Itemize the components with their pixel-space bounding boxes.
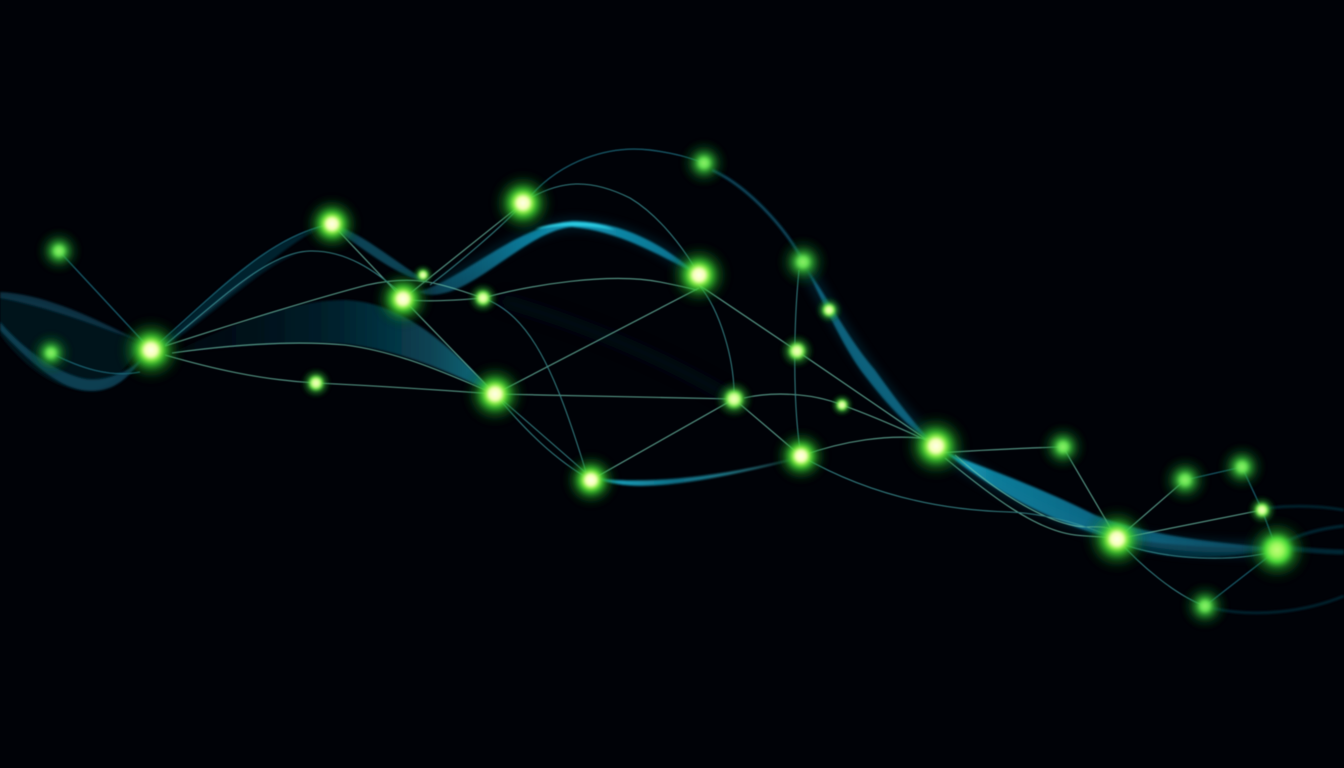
ribbon: right exit bands bbox=[1212, 506, 1344, 613]
ribbon: descending wide bbox=[806, 268, 936, 446]
small pale nodes bbox=[300, 264, 1277, 525]
ribbon: upper descending thin bbox=[712, 170, 805, 265]
ribbon: crest bbox=[418, 221, 697, 295]
connection lines bbox=[51, 149, 1277, 606]
ribbon: bottom trough bbox=[600, 460, 790, 485]
ribbon: node shoulder bbox=[335, 225, 428, 282]
bright lines bbox=[165, 203, 1262, 539]
glow: lower right bbox=[945, 452, 1275, 549]
glow under ribbons bbox=[440, 224, 1275, 549]
glow: crest bbox=[440, 224, 697, 285]
ribbon: far left lower edge bbox=[0, 322, 143, 391]
glow: descent bbox=[806, 268, 936, 446]
ribbon: central left fold bbox=[172, 300, 495, 394]
ribbon: lower right under band bbox=[1125, 538, 1275, 557]
large bright nodes bbox=[115, 169, 1153, 575]
ribbons bbox=[0, 170, 1344, 613]
teal lines bbox=[165, 184, 1272, 606]
ribbon: lower right sweep bbox=[945, 452, 1275, 552]
ribbon: far left body bbox=[0, 296, 140, 391]
dim lines bbox=[51, 149, 1277, 606]
ribbon: rising second band bbox=[160, 251, 305, 350]
lime node bbox=[1241, 514, 1313, 586]
ribbon: rising to first node bbox=[155, 226, 325, 351]
ribbon: far left upper edge bbox=[0, 292, 145, 344]
ribbon: faint diagonal sweep bbox=[500, 300, 735, 400]
ribbon: crest highlight bbox=[535, 222, 615, 230]
nodes bbox=[28, 138, 1313, 631]
dim green nodes bbox=[28, 138, 1267, 631]
